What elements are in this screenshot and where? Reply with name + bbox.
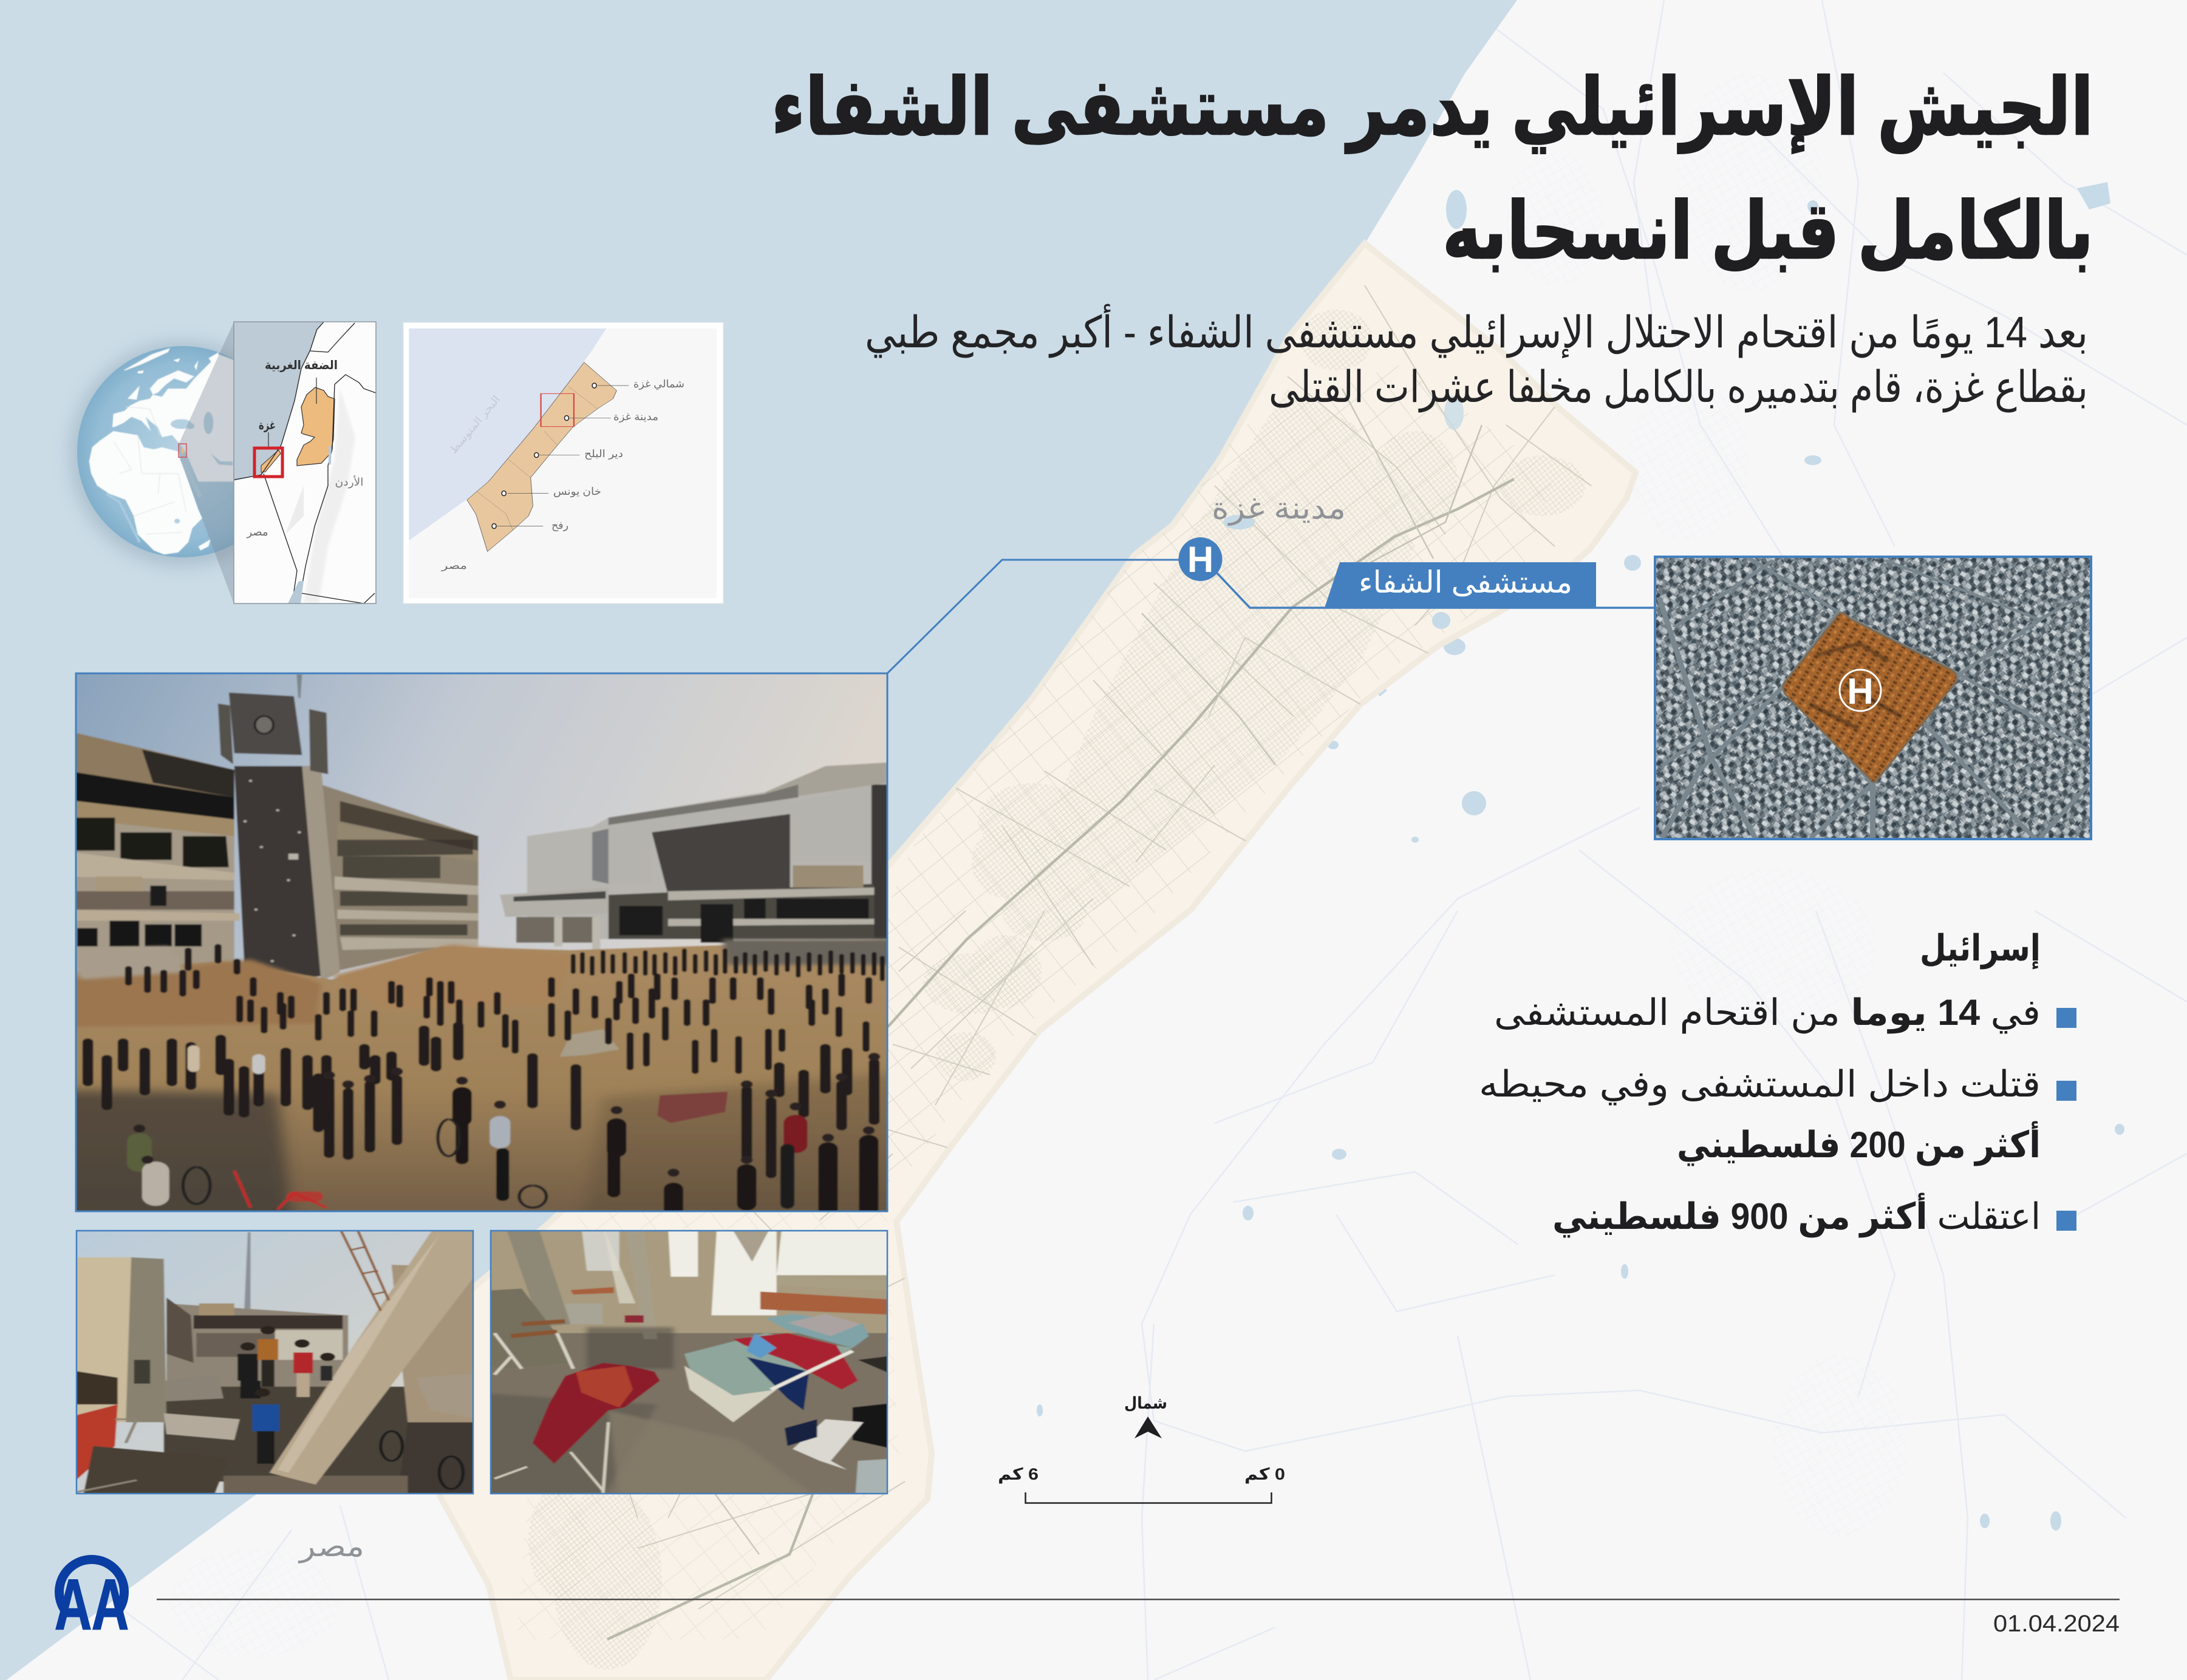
main photo: destroyed hospital courtyard [61, 656, 911, 1233]
hospital marker: H [1187, 539, 1213, 580]
north arrow [1124, 1394, 1167, 1438]
map: water bodies [1037, 182, 2124, 1531]
compound H marker: H [1847, 671, 1874, 712]
date: 01.04.2024 [1993, 1611, 2120, 1637]
fact 2: قتلت داخل المستشفى وفي محيطه [1479, 1064, 2041, 1106]
hospital marker [1178, 537, 1222, 581]
debris right [853, 1401, 907, 1452]
photo: collapsed structure [61, 1214, 494, 1500]
bed [684, 1333, 853, 1395]
Al-Shifa compound [1783, 613, 1957, 782]
labels: governorates: شمالي غزة [633, 378, 684, 390]
globe location marker [179, 444, 186, 457]
photo: damaged hospital ward [473, 1214, 907, 1500]
footer divider [157, 1599, 2120, 1600]
red blanket [533, 1363, 660, 1464]
inset map: Gaza governorates [403, 322, 723, 604]
globe locator [65, 336, 233, 572]
crowd heads [139, 1057, 874, 1172]
title [771, 63, 2093, 275]
subtitle: بعد 14 يومًا من اقتحام الاحتلال الإسرائيلي مستشفى الشفاء - أكبر مجمع طبي [865, 304, 2088, 358]
inland seas [171, 412, 233, 523]
tower [234, 766, 327, 981]
map: sea [0, 0, 1517, 1680]
connector: hospital to satellite image [1216, 573, 1655, 608]
label: Egypt: مصر [247, 526, 268, 539]
West Bank [297, 387, 335, 466]
inset map: region [234, 322, 376, 604]
label: Gaza: غزة [259, 419, 276, 432]
fact 2 [1479, 1064, 2076, 1166]
labels: governorates: دير البلح [584, 448, 623, 460]
people [248, 1354, 251, 1398]
Africa [89, 431, 202, 554]
hospital label banner: مستشفى الشفاء [1359, 565, 1572, 599]
ground [61, 939, 911, 1233]
Eurasia [112, 354, 235, 481]
hospital label banner [1325, 562, 1596, 608]
connector: hospital to main photo [887, 560, 1181, 673]
fact 2: أكثر من 200 فلسطيني [1677, 1121, 2041, 1166]
label: Jordan: الأردن [335, 475, 363, 488]
label: Egypt: مصر [298, 1531, 364, 1563]
Gaza small territory [261, 450, 281, 472]
AA logo: AA [55, 1565, 129, 1645]
labels: governorates: مصر [441, 560, 467, 571]
Gaza red box [254, 448, 282, 477]
labels: governorates: مدينة غزة [613, 411, 658, 423]
subtitle [865, 304, 2088, 413]
AA logo [55, 1560, 129, 1645]
north arrow: شمال [1124, 1394, 1167, 1412]
scale bar: 6 كم [998, 1465, 1039, 1483]
objects on ground [657, 1092, 728, 1123]
map: Gaza Strip territory [395, 243, 1636, 1680]
bridge [500, 888, 609, 917]
tower wing [321, 784, 479, 972]
fact 1: في 14 يوما من اقتحام المستشفى [1494, 992, 2041, 1034]
right building [527, 766, 911, 939]
label: West Bank: الضفة الغربية [265, 359, 338, 372]
locator wedge [179, 322, 234, 604]
label: Gaza City: مدينة غزة [1212, 491, 1346, 526]
scale bar: 0 كم [1244, 1465, 1285, 1483]
labels: governorates [441, 378, 684, 571]
governorates shape [467, 362, 616, 551]
labels: governorates: خان يونس [553, 486, 601, 497]
heading: Israel: إسرائيل [1920, 928, 2041, 970]
crowd [573, 950, 882, 979]
compound H marker [1840, 670, 1881, 712]
fact 3: اعتقلت أكثر من 900 فلسطيني [1552, 1192, 2041, 1238]
label: Mediterranean: البحر المتوسط [448, 393, 502, 456]
key facts list [1479, 928, 2076, 1238]
labels: governorates: رفح [551, 520, 568, 532]
scale bar [998, 1465, 1285, 1503]
left building [61, 729, 234, 972]
satellite image [1655, 557, 2091, 839]
